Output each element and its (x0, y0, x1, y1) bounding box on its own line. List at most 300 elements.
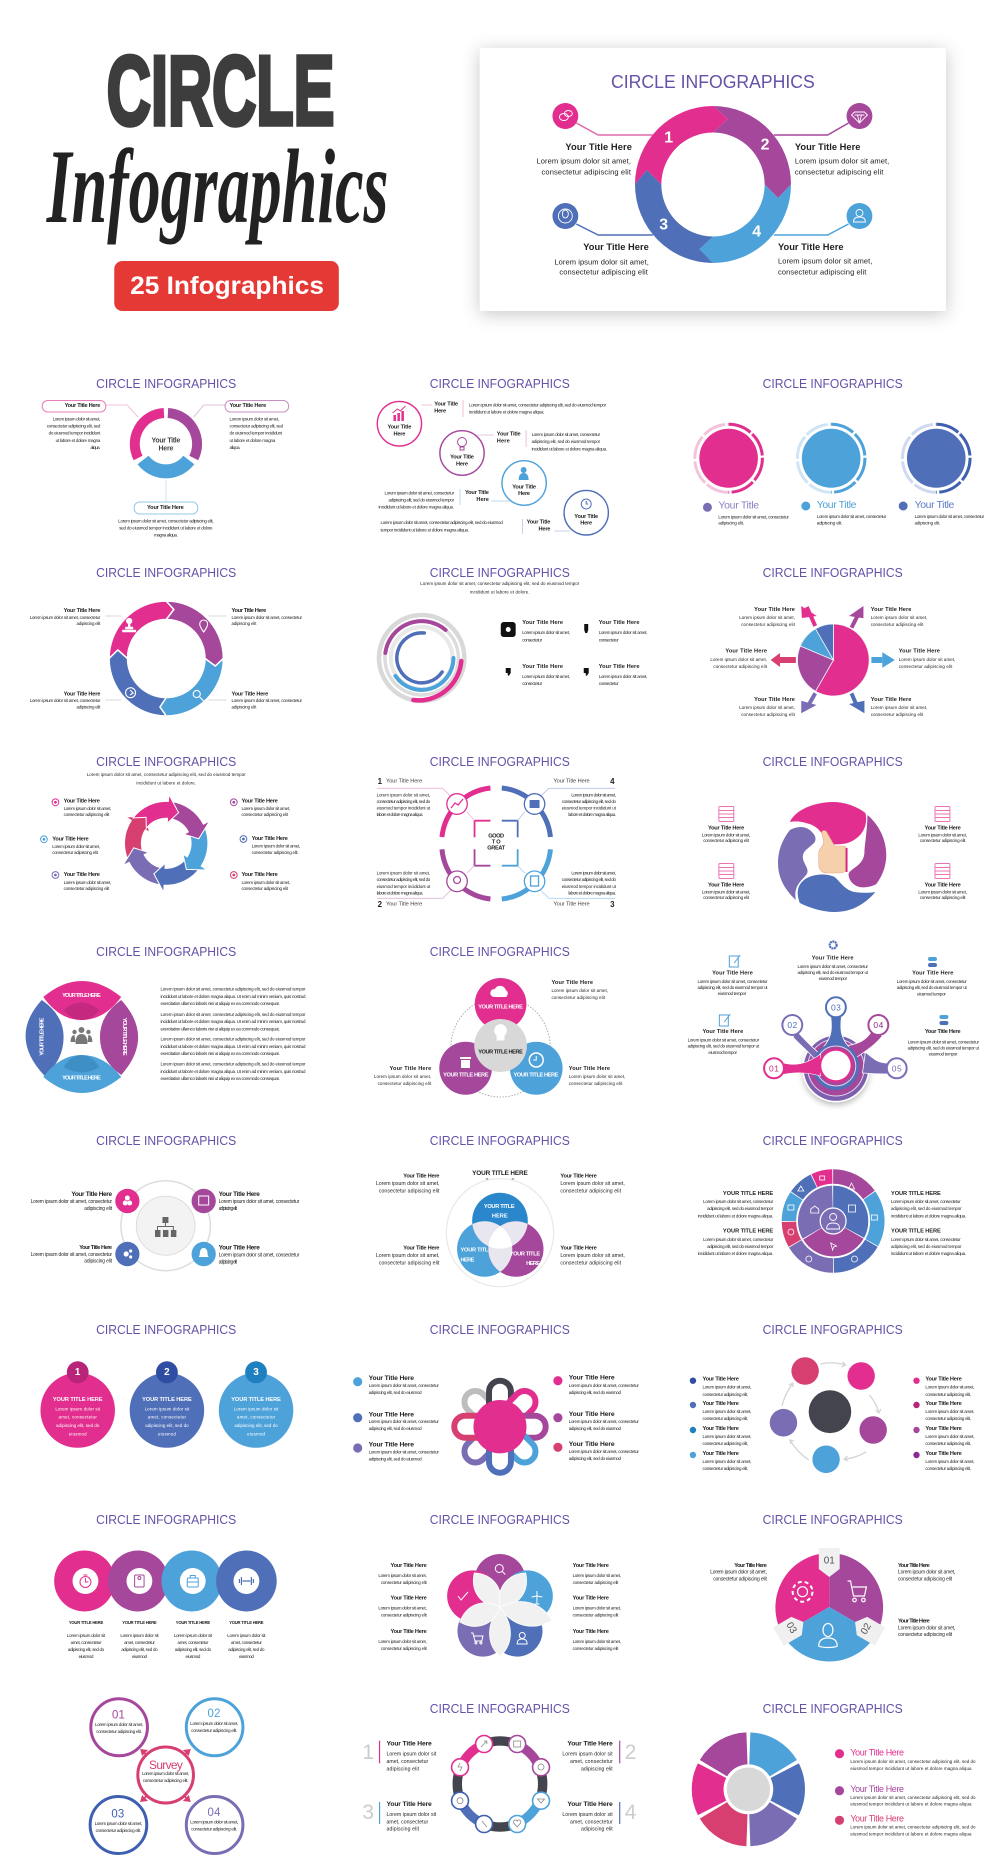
labels: consectetur adipiscing elit (551, 995, 606, 1000)
labels: consectetur adipiscing elit (741, 622, 796, 627)
labels left: adipiscing elit, sed do eiusmod (369, 1390, 422, 1395)
labels: adipiscing elit (77, 704, 101, 710)
label 4: 4 (625, 1801, 637, 1824)
labels: Lorem ipsum dolor sit amet, consectetur (688, 1037, 760, 1043)
heading: CIRCLE INFOGRAPHICS (430, 755, 570, 769)
right text: ut labore et dolore magna (230, 438, 276, 443)
panel: four wedge circle (26, 945, 306, 1093)
text block 4 (381, 520, 550, 533)
labels: adipiscing elit (219, 1260, 238, 1266)
labels: consectetur adipiscing elit (64, 886, 110, 891)
labels: Your Title Here (403, 1245, 439, 1251)
labels: Your Title Here (708, 883, 744, 889)
labels: Your Title Here (551, 980, 593, 986)
subheading: Lorem ipsum dolor sit amet, consectetur adipiscing elit, sed do eiusmod tempor (420, 581, 580, 586)
lorem blocks (160, 986, 306, 1081)
labels left: Lorem ipsum dolor sit amet, consectetur (703, 1237, 774, 1242)
labels: Your Title Here (403, 1173, 439, 1179)
node 05 (887, 1058, 907, 1078)
lorem blocks: exercitation ullamco laboris nisi ut aliquip ex ea commodo consequat. (160, 1026, 280, 1032)
labels: YOUR TITLE HERE (176, 1620, 210, 1625)
labels right: YOUR TITLE HERE (891, 1191, 941, 1197)
thumb (819, 831, 847, 873)
labels: Your Title Here (573, 1629, 609, 1635)
labels left: adipiscing elit, sed do eiusmod tempor (707, 1244, 774, 1249)
circle 1: adipiscing elit, sed do (56, 1423, 100, 1428)
wedges (26, 981, 138, 1093)
labels right (891, 1191, 966, 1256)
arrows (771, 606, 895, 713)
node 02 (782, 1015, 802, 1035)
labels: Lorem ipsum dolor sit amet, (710, 657, 767, 662)
circle 2: adipiscing elit, sed do (145, 1423, 189, 1428)
circle 1: eiusmod (69, 1431, 87, 1437)
label 1: consectetur adipiscing elit, sed do (377, 799, 431, 804)
heading: CIRCLE INFOGRAPHICS (96, 377, 236, 391)
tabs (773, 1548, 885, 1646)
venn circles: HERE (461, 1257, 475, 1263)
labels: Lorem ipsum dolor sit amet, (64, 880, 111, 885)
sectors (775, 1553, 883, 1661)
labels: Your Title Here (573, 1596, 609, 1602)
text block 3: Your Title (465, 490, 489, 496)
left text (47, 416, 101, 450)
label 2: consectetur adipiscing elit, sed do (377, 877, 431, 882)
labels: consectetur adipiscing elit (871, 712, 924, 717)
circle labels (388, 425, 598, 527)
title: CIRCLE: CIRCLE (107, 36, 334, 146)
legend 3: adipiscing elit. (915, 520, 940, 526)
four arrow ring: 4 (752, 223, 761, 241)
labels: Lorem ipsum dolor sit amet, (898, 1625, 955, 1631)
heading: CIRCLE INFOGRAPHICS (96, 1323, 236, 1337)
right text (230, 416, 284, 450)
labels: Your Title Here (898, 1563, 930, 1569)
labels: consectetur adipiscing elit (899, 664, 953, 669)
legend 1: Lorem ipsum dolor sit amet, consectetur (718, 514, 789, 520)
panel: arrow ring with icons (30, 566, 303, 716)
ring 01 (91, 1699, 147, 1756)
label 3: consectetur adipiscing elit, sed do (562, 877, 617, 882)
lorem blocks: incididunt ut labore et dolore magna aliqua. Ut enim ad minim veniam, quis nostrud (160, 1019, 306, 1024)
ring 04 (186, 1796, 243, 1854)
labels left: YOUR TITLE HERE (723, 1229, 773, 1235)
labels right: consectetur adipiscing elit, (925, 1392, 971, 1397)
label 4: labore et dolore magna aliqua. (568, 812, 616, 817)
text block 4: tempor incididunt ut labore et dolore magna aliqua. (381, 527, 469, 533)
legend 1: eiusmod tempor incididunt ut labore et dolore magna aliqua (850, 1766, 972, 1771)
labels (374, 980, 625, 1086)
text block 2: adipiscing elit, sed do eiusmod tempor (532, 439, 601, 444)
labels: Your Title Here (79, 1245, 112, 1251)
labels right: adipiscing elit, sed do eiusmod (569, 1426, 621, 1431)
outer circles (447, 1554, 553, 1657)
labels right: adipiscing elit, sed do eiusmod (569, 1456, 621, 1461)
labels (522, 620, 647, 686)
label 3: amet, consectetur (387, 1819, 429, 1825)
labels: Your Title Here (232, 608, 266, 614)
four arrow ring (635, 106, 791, 263)
survey centre: consectetur adipiscing elit. (143, 1778, 188, 1783)
wedges: YOUR TITLE HERE (62, 1076, 101, 1082)
right text: aliqua. (230, 445, 240, 450)
text block 3: Lorem ipsum dolor sit amet, consectetur (385, 490, 455, 496)
bottom text: sed do eiusmod tempor incididunt ut labore et dolore (119, 525, 213, 531)
panel: chain ring (362, 1702, 637, 1840)
label 2: eiusmod tempor incididunt ut (377, 884, 431, 889)
labels: eiusmod tempor (929, 1051, 958, 1057)
labels right: YOUR TITLE HERE (891, 1229, 941, 1235)
labels: adipiscing elit, sed do (175, 1647, 212, 1652)
labels left: incididunt ut labore et dolore magna aliqua. (698, 1213, 773, 1219)
circles (115, 1189, 216, 1266)
legend 2: eiusmod tempor incididunt ut labore et dolore magna aliqua (850, 1801, 972, 1807)
circle 3: YOUR TITLE HERE (231, 1397, 281, 1403)
label 4 (562, 1801, 637, 1833)
labels: Lorem ipsum dolor sit (120, 1633, 159, 1638)
heading: CIRCLE INFOGRAPHICS (96, 945, 236, 959)
labels (31, 1191, 300, 1266)
legend 3: Your Title Here (850, 1813, 904, 1823)
labels: Lorem ipsum dolor sit amet, consectetur (30, 615, 101, 620)
labels: Your Title Here (390, 1596, 427, 1602)
heading: CIRCLE INFOGRAPHICS (430, 1134, 570, 1148)
orbit arrows (782, 1362, 881, 1461)
label 4: amet, consectetur (570, 1819, 613, 1825)
circle 2: 2 (164, 1367, 170, 1378)
legend 1 (835, 1747, 976, 1771)
labels: consectetur (522, 637, 543, 643)
left text: ut labore et dolore magna (56, 438, 101, 443)
labels: Lorem ipsum dolor sit (174, 1633, 213, 1638)
label 4: Your Title Here (553, 778, 590, 784)
labels left: Lorem ipsum dolor sit amet, consectetur (369, 1449, 439, 1455)
legend 2: Lorem ipsum dolor sit amet, consectetur (817, 514, 887, 519)
labels right: Your Title Here (569, 1374, 615, 1382)
labels right: Lorem ipsum dolor sit amet, (925, 1459, 975, 1464)
heading: CIRCLE INFOGRAPHICS (96, 1134, 236, 1148)
labels: Your Title Here (754, 607, 795, 613)
wedges: YOUR TITLE HERE (62, 993, 101, 999)
labels: consectetur adipiscing elit (379, 1189, 440, 1195)
circles: YOUR TITLE HERE (478, 1050, 523, 1056)
label top left: Your Title Here (565, 142, 632, 152)
label 1: amet, consectetur (387, 1759, 429, 1765)
circle blue (797, 424, 865, 492)
heading: CIRCLE INFOGRAPHICS (763, 1134, 903, 1148)
icon circles (552, 103, 872, 229)
labels: consectetur adipiscing elit (52, 850, 99, 855)
label bottom right: consectetur adipiscing elit (778, 267, 867, 277)
lorem blocks: incididunt ut labore et dolore magna aliqua. Ut enim ad minim veniam, quis nostrud (160, 1069, 306, 1074)
pill bottom: Your Title Here (147, 505, 184, 511)
labels right: Lorem ipsum dolor sit amet, (925, 1434, 975, 1439)
labels left: Your Title Here (702, 1451, 739, 1457)
heading: CIRCLE INFOGRAPHICS (430, 1513, 570, 1527)
label 3: adipiscing elit (387, 1827, 420, 1833)
labels left: Your Title Here (369, 1441, 414, 1449)
labels: Lorem ipsum dolor sit amet, (599, 630, 647, 635)
labels left: Your Title Here (702, 1401, 739, 1407)
orbit circles (770, 1357, 887, 1473)
arrows (484, 1178, 516, 1190)
labels: Lorem ipsum dolor sit amet, consectetur (698, 979, 768, 984)
label bottom left (554, 242, 649, 277)
labels: adipiscing elit (84, 1259, 113, 1265)
label top left (537, 142, 632, 177)
labels right: Lorem ipsum dolor sit amet, consectetur (569, 1449, 639, 1454)
pie (798, 624, 869, 696)
circle 2 (130, 1361, 204, 1448)
labels: Lorem ipsum dolor sit amet, (918, 832, 967, 838)
labels: adipiscing elit, sed do eiusmod tempor ut (908, 1045, 980, 1051)
swirl (778, 802, 886, 912)
labels left: Lorem ipsum dolor sit amet, (702, 1459, 752, 1464)
icons (501, 622, 589, 676)
labels: Lorem ipsum dolor sit (227, 1633, 266, 1638)
labels: Your Title Here (569, 1066, 610, 1072)
labels: Lorem ipsum dolor sit amet, (551, 988, 608, 993)
labels: Lorem ipsum dolor sit amet, (378, 1639, 427, 1644)
right text: do eiusmod tempor incididunt (230, 430, 283, 436)
ring 03: consectetur adipiscing elit. (96, 1828, 141, 1833)
lorem blocks: Lorem ipsum dolor sit amet, consectetur adipiscing elit, sed do eiusmod tempor (160, 1061, 306, 1067)
bottom text: magna aliqua. (154, 532, 178, 538)
labels left: Lorem ipsum dolor sit amet, (702, 1434, 752, 1439)
labels (710, 607, 955, 717)
labels: eiusmod tempor (917, 991, 946, 997)
pill bottom (134, 502, 198, 514)
labels: YOUR TITLE HERE (69, 1620, 103, 1625)
circles (439, 978, 563, 1097)
label 2: Your Title Here (386, 902, 422, 908)
labels: Your Title Here (64, 691, 100, 697)
text block 3: incididunt ut labore et dolore magna aliqua. (379, 504, 454, 510)
circle labels: Your Title (450, 455, 474, 461)
legend 1: Your Title (718, 500, 759, 512)
circle labels: Here (393, 431, 405, 438)
text block 2: Your Title (497, 432, 521, 438)
labels right: Your Title Here (925, 1401, 962, 1407)
labels right: Lorem ipsum dolor sit amet, consectetur (891, 1199, 961, 1204)
node icons (457, 1741, 544, 1827)
label 3: Your Title Here (387, 1801, 432, 1808)
labels left: consectetur adipiscing elit, (702, 1441, 748, 1446)
center text: GOOD (488, 834, 504, 840)
labels: Your Title Here (702, 1029, 743, 1035)
labels: amet, consectetur (71, 1640, 102, 1645)
label 4: eiusmod tempor incididunt ut (562, 805, 617, 811)
labels right: incididunt ut labore et dolore magna aliqua. (891, 1213, 966, 1219)
legend 3 (899, 500, 985, 526)
pill right: Your Title Here (230, 403, 266, 409)
lorem blocks: exercitation ullamco laboris nisi ut aliquip ex ea commodo consequat. (160, 1001, 280, 1006)
panel: venn diagram (376, 1134, 625, 1287)
label 1 (362, 1740, 437, 1772)
lorem blocks: Lorem ipsum dolor sit amet, consectetur adipiscing elit, sed do eiusmod tempor (160, 1036, 306, 1042)
labels: eiusmod (186, 1654, 201, 1659)
circle labels: Your Title (574, 514, 598, 520)
labels left: Lorem ipsum dolor sit amet, consectetur (369, 1383, 439, 1388)
circle 3: adipiscing elit, sed do (234, 1423, 278, 1428)
labels: Lorem ipsum dolor sit amet, consectetur (31, 1252, 112, 1258)
wedges: YOUR TITLE HERE (121, 1018, 127, 1056)
legend 3: Lorem ipsum dolor sit amet, consectetur adipiscing elit, sed do (850, 1824, 976, 1830)
circle dark blue (902, 424, 970, 492)
labels right: consectetur adipiscing elit, (925, 1416, 971, 1421)
calendars (719, 806, 950, 878)
label 2 (562, 1740, 636, 1772)
text block 1: Your Title (434, 402, 458, 408)
title: Infographics script: Infographics (45, 128, 388, 245)
labels: eiusmod (132, 1654, 147, 1659)
survey centre: Lorem ipsum dolor sit amet, (142, 1771, 189, 1776)
four arrow ring: 1 (664, 129, 673, 147)
label top right: Lorem ipsum dolor sit amet, (795, 156, 889, 166)
venn circles (446, 1179, 554, 1287)
labels: eiusmod tempor (708, 1050, 737, 1055)
connectors (421, 400, 570, 534)
label top right: consectetur adipiscing elit (795, 167, 884, 177)
labels left: adipiscing elit, sed do eiusmod (369, 1426, 422, 1431)
lorem blocks: incididunt ut labore et dolore magna aliqua. Ut enim ad minim veniam, quis nostrud (160, 994, 306, 999)
labels: consectetur adipiscing elit (381, 1646, 427, 1651)
labels: Lorem ipsum dolor sit amet, (702, 832, 750, 838)
labels: Lorem ipsum dolor sit amet, (241, 806, 290, 811)
panel: concentric arcs (379, 566, 647, 701)
label bottom left: consectetur adipiscing elit (559, 267, 649, 277)
panel: five petal flower (378, 1513, 621, 1657)
node 04 (868, 1015, 888, 1035)
labels: Your Title Here (812, 956, 854, 962)
labels: Your Title Here (712, 970, 753, 976)
labels (30, 608, 303, 710)
circle 1: Lorem ipsum dolor sit (55, 1406, 101, 1412)
heading: CIRCLE INFOGRAPHICS (763, 377, 903, 391)
center label: Your Title (152, 437, 180, 445)
circle labels: Here (580, 521, 592, 527)
labels: Your Title Here (52, 836, 89, 842)
labels: Lorem ipsum dolor sit amet, consectetur (908, 1039, 979, 1045)
circle labels: Your Title (512, 484, 536, 490)
labels: consectetur adipiscing elit (741, 712, 796, 717)
legend 3: eiusmod tempor incididunt ut labore et dolore magna aliqua (850, 1831, 972, 1837)
labels: Your Title Here (599, 620, 639, 626)
venn circles: HERE (526, 1261, 540, 1267)
label 3: 3 (362, 1801, 374, 1824)
icon: person (519, 467, 529, 480)
labels right: Your Title Here (925, 1376, 962, 1382)
labels: consectetur adipiscing elit (920, 838, 966, 843)
ring 01: 01 (112, 1710, 125, 1722)
labels: adipiscing elit, sed do eiusmod tempor ut (897, 985, 968, 990)
center label (152, 437, 180, 453)
labels: Your Title Here (241, 799, 278, 805)
circle 3: 3 (253, 1367, 259, 1378)
labels: consectetur adipiscing elit (252, 850, 298, 855)
label 2: amet, consectetur (570, 1759, 613, 1765)
outer segments (772, 1159, 895, 1283)
labels right: Your Title Here (569, 1411, 615, 1418)
labels: consectetur adipiscing elit (573, 1612, 619, 1618)
labels: consectetur (599, 681, 619, 686)
ring segments (444, 1728, 556, 1840)
labels: consectetur adipiscing elit (379, 1261, 440, 1267)
legend 3: Your Title (915, 500, 955, 511)
label top right: Your Title Here (795, 142, 860, 152)
label bottom left: Your Title Here (583, 242, 649, 252)
panel: segmented wheel (698, 1134, 966, 1283)
labels: eiusmod (239, 1654, 254, 1659)
circle labels: Here (456, 461, 468, 467)
labels: adipiscing elit (232, 704, 257, 710)
centre circle (727, 1768, 770, 1811)
panel: looped flower (353, 1323, 639, 1473)
label 1: 1 (362, 1741, 374, 1764)
labels: Lorem ipsum dolor sit amet, (739, 705, 795, 710)
badge: 25 Infographics: 25 Infographics (130, 272, 324, 300)
panel: pie with arrows (710, 566, 955, 717)
subheading: incididunt ut labore et dolore. (470, 589, 530, 595)
labels: Lorem ipsum dolor sit amet, (899, 657, 955, 662)
ring 03 (90, 1796, 147, 1854)
circle 1: YOUR TITLE HERE (53, 1397, 103, 1403)
labels (52, 799, 300, 891)
heading: CIRCLE INFOGRAPHICS (430, 945, 570, 959)
labels left: Your Title Here (702, 1426, 739, 1432)
heading: CIRCLE INFOGRAPHICS (763, 1323, 903, 1337)
labels: consectetur adipiscing elit (381, 1580, 427, 1585)
labels right: Lorem ipsum dolor sit amet, (925, 1384, 975, 1390)
labels: amet, consectetur (178, 1640, 209, 1645)
labels: Lorem ipsum dolor sit amet, (378, 1573, 427, 1578)
heading: CIRCLE INFOGRAPHICS (96, 1513, 236, 1527)
labels: Lorem ipsum dolor sit amet, consectetur (232, 698, 303, 703)
labels right: incididunt ut labore et dolore magna aliqua. (891, 1251, 966, 1256)
subheading (87, 772, 246, 786)
labels: Lorem ipsum dolor sit amet, (522, 674, 570, 679)
text block 2: incididunt ut labore et dolore magna aliqua. (532, 446, 607, 452)
icon: chart (392, 406, 405, 421)
labels left: consectetur adipiscing elit, (702, 1416, 748, 1421)
labels: Lorem ipsum dolor sit amet, consectetur (797, 964, 869, 969)
labels right: Lorem ipsum dolor sit amet, consectetur (891, 1237, 961, 1242)
labels (376, 1173, 625, 1267)
panel: three sector pie (710, 1513, 955, 1661)
tabs: 02 (859, 1621, 874, 1637)
lorem blocks: incididunt ut labore et dolore magna aliqua. Ut enim ad minim veniam, quis nostrud (160, 1044, 306, 1049)
title above: YOUR TITLE HERE (472, 1170, 528, 1177)
survey arrows (140, 1749, 191, 1802)
venn circles: YOUR TITLE (510, 1251, 540, 1257)
rings (121, 1181, 210, 1271)
labels: Lorem ipsum dolor sit amet, (64, 806, 111, 811)
labels left: Your Title Here (369, 1375, 414, 1382)
center text: TO (492, 840, 501, 846)
quarter arcs (442, 788, 550, 899)
left text: consectetur adipiscing elit, sed (47, 423, 101, 429)
labels right (913, 1376, 975, 1471)
labels: consectetur adipiscing elit (703, 895, 750, 900)
label 2: Lorem ipsum dolor sit (562, 1752, 613, 1758)
label 3: labore et dolore magna aliqua. (568, 890, 616, 896)
right text: Lorem ipsum dolor sit amet, (230, 416, 279, 422)
labels: Your Title Here (522, 664, 563, 670)
labels right: adipiscing elit, sed do eiusmod tempor (891, 1244, 962, 1249)
legend 2: Lorem ipsum dolor sit amet, consectetur adipiscing elit, sed do (850, 1795, 976, 1800)
node 02: 02 (787, 1020, 798, 1030)
labels: adipiscing elit (219, 1206, 238, 1212)
